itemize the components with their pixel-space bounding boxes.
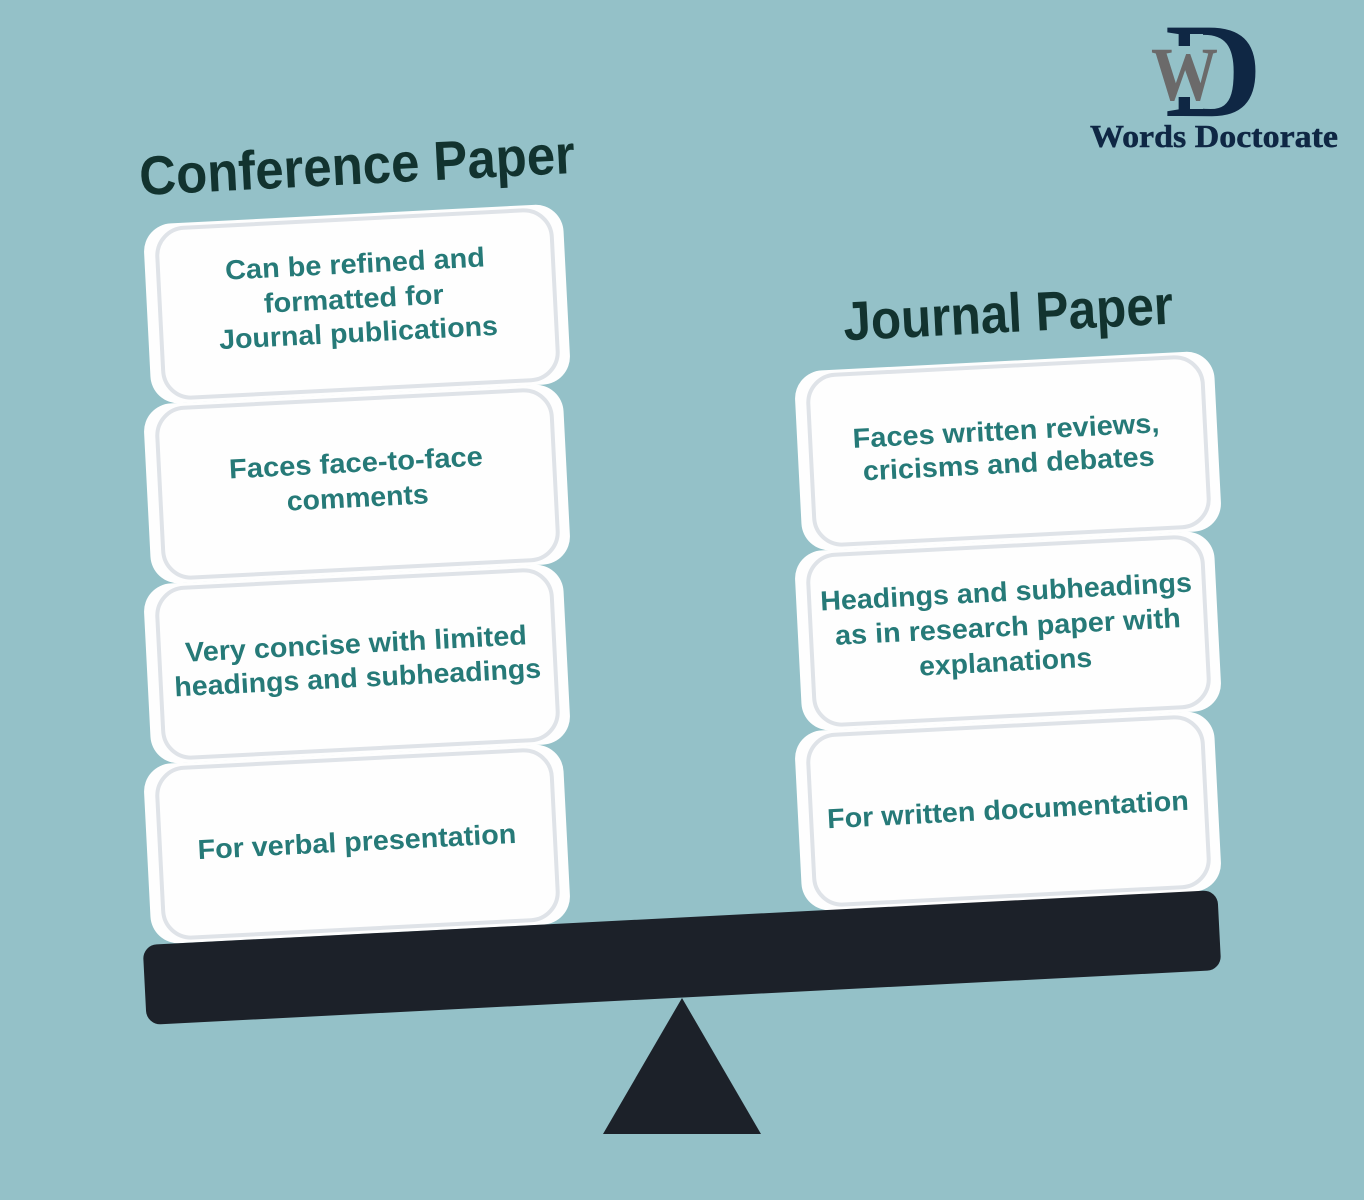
- panel: conference card 4: [143, 743, 571, 945]
- card text: For verbal presentation: [197, 818, 517, 865]
- heading: Conference Paper: Conference Paper: [138, 123, 576, 207]
- scale beam: [143, 890, 1221, 1025]
- card text: Faces written reviews,: [852, 407, 1160, 454]
- panel: journal card 3: [794, 710, 1222, 912]
- panel: journal card 1: cricisms and debates: [862, 441, 1155, 486]
- panel: journal card 2: explanations: [918, 642, 1093, 682]
- logo wordmark: Words Doctorate: [1090, 118, 1338, 154]
- logo letter D: D: [1165, 0, 1262, 146]
- card text: Faces face-to-face: [228, 441, 484, 484]
- scale fulcrum: [603, 998, 761, 1134]
- card text: For written documentation: [826, 785, 1189, 834]
- panel: journal card 2: [794, 530, 1222, 732]
- card text: Can be refined and: [224, 241, 486, 286]
- heading: Journal Paper: Journal Paper: [842, 274, 1174, 352]
- panel: journal card 2: as in research paper with: [834, 602, 1181, 651]
- panel: conference card 2: comments: [286, 478, 429, 517]
- panel: journal card 1: [794, 350, 1222, 552]
- card text: Headings and subheadings: [819, 567, 1193, 617]
- card text: Very concise with limited: [184, 619, 528, 668]
- logo letter W: W: [1151, 33, 1218, 117]
- logo: Words Doctorate: [1090, 0, 1338, 154]
- panel: conference card 1: formatted for: [263, 279, 445, 319]
- panel: conference card 3: [143, 563, 571, 765]
- panel: conference card 2: [143, 383, 571, 585]
- panel: conference card 1: [143, 203, 571, 405]
- panel: conference card 1: Journal publications: [218, 310, 499, 355]
- panel: conference card 3: headings and subheadings: [174, 653, 542, 702]
